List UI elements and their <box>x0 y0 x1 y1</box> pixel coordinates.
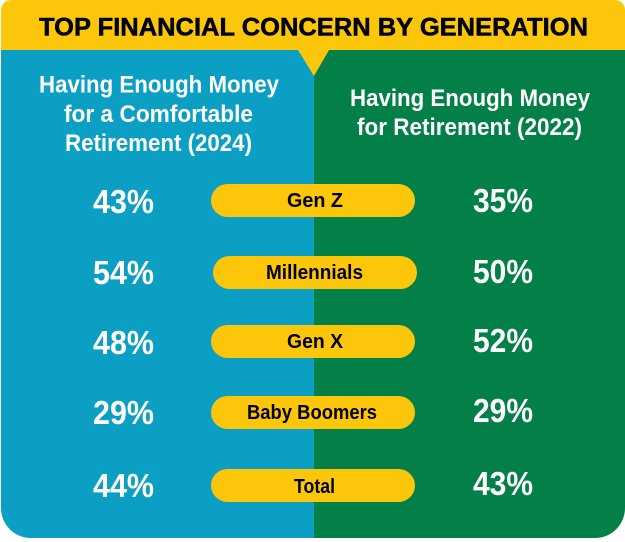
row: Baby Boomers: 29% <box>473 392 533 429</box>
right column heading: Having Enough Money <box>350 85 590 112</box>
row: Gen Z: Gen Z <box>287 190 343 212</box>
left column heading <box>39 72 279 157</box>
row: Gen X <box>93 322 533 361</box>
row: Millennials: 50% <box>473 253 533 290</box>
row: Millennials: 54% <box>93 254 154 291</box>
row: Gen X: Gen X <box>287 331 344 353</box>
header banner with pointer <box>1 0 625 76</box>
row: Gen Z: 35% <box>473 182 533 219</box>
right column heading <box>350 85 590 141</box>
row: Total: Total <box>294 476 335 498</box>
row: Millennials: Millennials <box>266 262 363 284</box>
row: Total <box>93 465 533 504</box>
panel: right green column <box>314 50 625 538</box>
left column heading: Having Enough Money <box>39 72 279 98</box>
row: Gen Z: 43% <box>93 183 154 220</box>
title: TOP FINANCIAL CONCERN BY GENERATION <box>39 14 588 42</box>
left column heading: for a Comfortable <box>64 101 253 128</box>
panel: left blue column <box>1 50 314 538</box>
row: Total: 44% <box>93 467 154 504</box>
row: Baby Boomers: Baby Boomers <box>247 402 377 424</box>
left column heading: Retirement (2024) <box>65 130 252 157</box>
row: Gen X: 52% <box>473 322 533 359</box>
row: Millennials <box>93 253 533 291</box>
right column heading: for Retirement (2022) <box>357 114 582 141</box>
row: Gen Z <box>93 182 533 220</box>
row: Baby Boomers <box>93 392 533 431</box>
row: Baby Boomers: 29% <box>93 394 154 431</box>
row: Gen X: 48% <box>93 324 154 361</box>
row: Total: 43% <box>473 465 533 502</box>
